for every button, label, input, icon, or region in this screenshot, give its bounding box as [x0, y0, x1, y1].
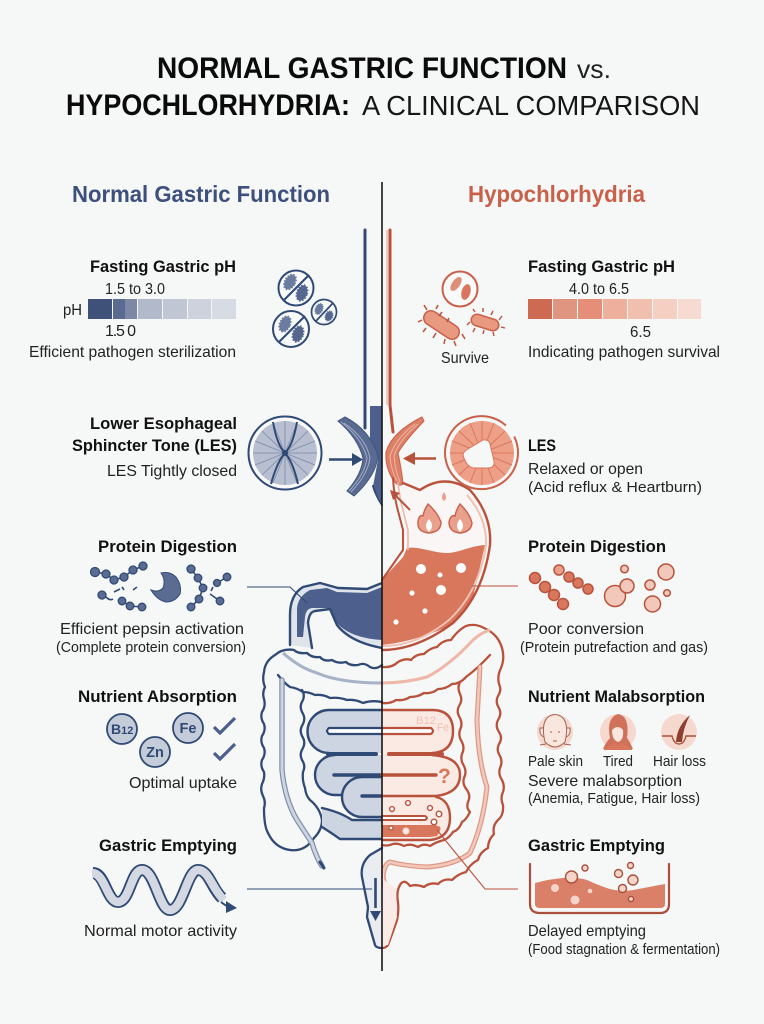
- icon: stagnant fluid basin: [530, 862, 669, 913]
- esophagus right half: [387, 230, 393, 432]
- panel: nutrient absorption: Optimal uptake: [129, 775, 237, 792]
- panel: protein digestion normal: (Complete protein conversion): [56, 640, 246, 656]
- sphincter right muscle: [386, 417, 424, 485]
- arrow: normal sphincter: [329, 453, 363, 466]
- digestive tract diagram: [247, 230, 518, 948]
- panel: protein digestion normal: Protein Digestion: [98, 537, 237, 556]
- icon: check marks: [214, 718, 235, 759]
- icon: nutrient Zn: Zn: [146, 745, 164, 761]
- icon: closed sphincter: [248, 416, 322, 490]
- icon: flames: [418, 492, 472, 533]
- bacterium large: [418, 305, 465, 346]
- bacterium small: [467, 308, 505, 336]
- panel: fasting pH hypochlorhydria: 6.5: [630, 324, 651, 341]
- panel: gastric emptying normal: Normal motor activity: [84, 923, 237, 940]
- large intestine right half: [382, 625, 504, 948]
- stomach left half: [290, 583, 382, 648]
- large intestine left half: [261, 650, 382, 868]
- icon: surviving bacteria: [418, 272, 505, 367]
- faded nutrient labels: B12: [416, 715, 436, 727]
- icon: surviving bacteria: Survive: [441, 350, 489, 367]
- panel: gastric emptying hypochlorhydria: (Food stagnation & fermentation): [528, 942, 720, 958]
- panel: gastric emptying hypochlorhydria: Gastric Emptying: [528, 836, 665, 855]
- icon: nutrient B12: [107, 714, 137, 744]
- stomach right half: [382, 478, 490, 650]
- pepsin enzyme: [151, 572, 180, 602]
- panel: gastric emptying hypochlorhydria: [528, 836, 720, 958]
- title: [66, 52, 700, 122]
- panel: nutrient malabsorption: Tired: [603, 754, 633, 770]
- icon: undigested protein and gas: [530, 564, 674, 612]
- panel: nutrient absorption: [78, 687, 237, 792]
- panel: fasting pH hypochlorhydria: Indicating pathogen survival: [528, 344, 720, 361]
- panel: nutrient malabsorption: Severe malabsorption: [528, 773, 682, 790]
- icon: blocked pathogens: [273, 270, 336, 347]
- panel: protein digestion hypochlorhydria: (Protein putrefaction and gas): [520, 640, 708, 656]
- title: vs.: [577, 54, 611, 84]
- heading: hypochlorhydria: Hypochlorhydria: [468, 181, 645, 207]
- panel: LES normal: LES Tightly closed: [107, 463, 237, 480]
- panel: protein digestion hypochlorhydria: [520, 537, 708, 656]
- panel: LES hypochlorhydria: [528, 436, 702, 496]
- icon: nutrient Zn: [140, 737, 170, 767]
- panel: fasting pH normal: Efficient pathogen sterilization: [29, 344, 236, 361]
- icon: nutrient B12: B12: [111, 721, 133, 737]
- panel: nutrient malabsorption: Nutrient Malabsorption: [528, 687, 705, 706]
- title: HYPOCHLORHYDRIA:: [66, 89, 350, 122]
- pH scale hypochlorhydria: [528, 299, 701, 319]
- panel: gastric emptying normal: Gastric Emptying: [99, 836, 237, 855]
- small intestine right half: [382, 710, 460, 840]
- title: A CLINICAL COMPARISON: [362, 90, 700, 121]
- panel: nutrient malabsorption: Pale skin: [528, 754, 583, 770]
- icon: peptides and pepsin: [90, 562, 231, 611]
- panel: protein digestion normal: [56, 537, 246, 656]
- sphincter left muscle: [338, 417, 382, 505]
- esophagus left half: [365, 230, 382, 504]
- icon: pale skin face: [537, 714, 573, 750]
- rectum right half: [383, 866, 397, 945]
- title: NORMAL GASTRIC FUNCTION: [157, 52, 567, 85]
- panel: LES normal: [72, 414, 237, 480]
- panel: LES hypochlorhydria: (Acid reflux & Heartburn): [528, 480, 702, 496]
- panel: gastric emptying hypochlorhydria: Delayed emptying: [528, 923, 646, 940]
- question mark: ?: [438, 765, 451, 788]
- pH scale normal: [88, 299, 236, 319]
- small intestine right half: Fe: [437, 722, 449, 734]
- icon: nutrient Fe: [173, 713, 203, 743]
- panel: fasting pH normal: pH: [63, 302, 82, 319]
- panel: LES normal: Lower Esophageal: [90, 414, 237, 433]
- panel: LES normal: Sphincter Tone (LES): [72, 436, 237, 455]
- panel: fasting pH normal: Fasting Gastric pH: [90, 257, 236, 276]
- panel: LES hypochlorhydria: Relaxed or open: [528, 461, 643, 478]
- icon: peristaltic wave: [92, 870, 237, 913]
- leader lines: [247, 586, 518, 889]
- icon: tired person: [600, 714, 636, 750]
- panel: protein digestion hypochlorhydria: Protein Digestion: [528, 537, 666, 556]
- panel: nutrient malabsorption: (Anemia, Fatigue, Hair loss): [528, 791, 700, 807]
- rectum left half: [362, 848, 382, 948]
- arrow: emptying downward: [370, 878, 381, 921]
- panel: fasting pH normal: [29, 257, 236, 361]
- icon: open sphincter: [445, 416, 518, 489]
- panel: fasting pH hypochlorhydria: Fasting Gastric pH: [528, 257, 675, 276]
- panel: fasting pH normal: 1.5 to 3.0: [105, 281, 165, 298]
- panel: protein digestion normal: Efficient pepsin activation: [60, 621, 244, 638]
- icon: hair loss: [661, 714, 697, 750]
- panel: fasting pH hypochlorhydria: 4.0 to 6.5: [569, 281, 629, 298]
- panel: fasting pH normal: 1.5 0: [105, 323, 136, 340]
- icon: nutrient Fe: Fe: [180, 721, 196, 737]
- small intestine left half: [308, 710, 382, 839]
- panel: nutrient malabsorption: [528, 687, 706, 807]
- panel: nutrient absorption: Nutrient Absorption: [78, 687, 237, 706]
- panel: LES hypochlorhydria: LES: [528, 436, 556, 455]
- arrow: hypochlorhydria sphincter: [403, 452, 436, 465]
- center divider line: [381, 182, 383, 971]
- arrow: acid reflux: [390, 490, 410, 510]
- panel: gastric emptying normal: [84, 836, 237, 940]
- panel: nutrient malabsorption: Hair loss: [653, 754, 706, 770]
- panel: fasting pH hypochlorhydria: [528, 257, 720, 361]
- heading: normal gastric function: Normal Gastric Function: [72, 181, 330, 207]
- panel: protein digestion hypochlorhydria: Poor conversion: [528, 621, 644, 638]
